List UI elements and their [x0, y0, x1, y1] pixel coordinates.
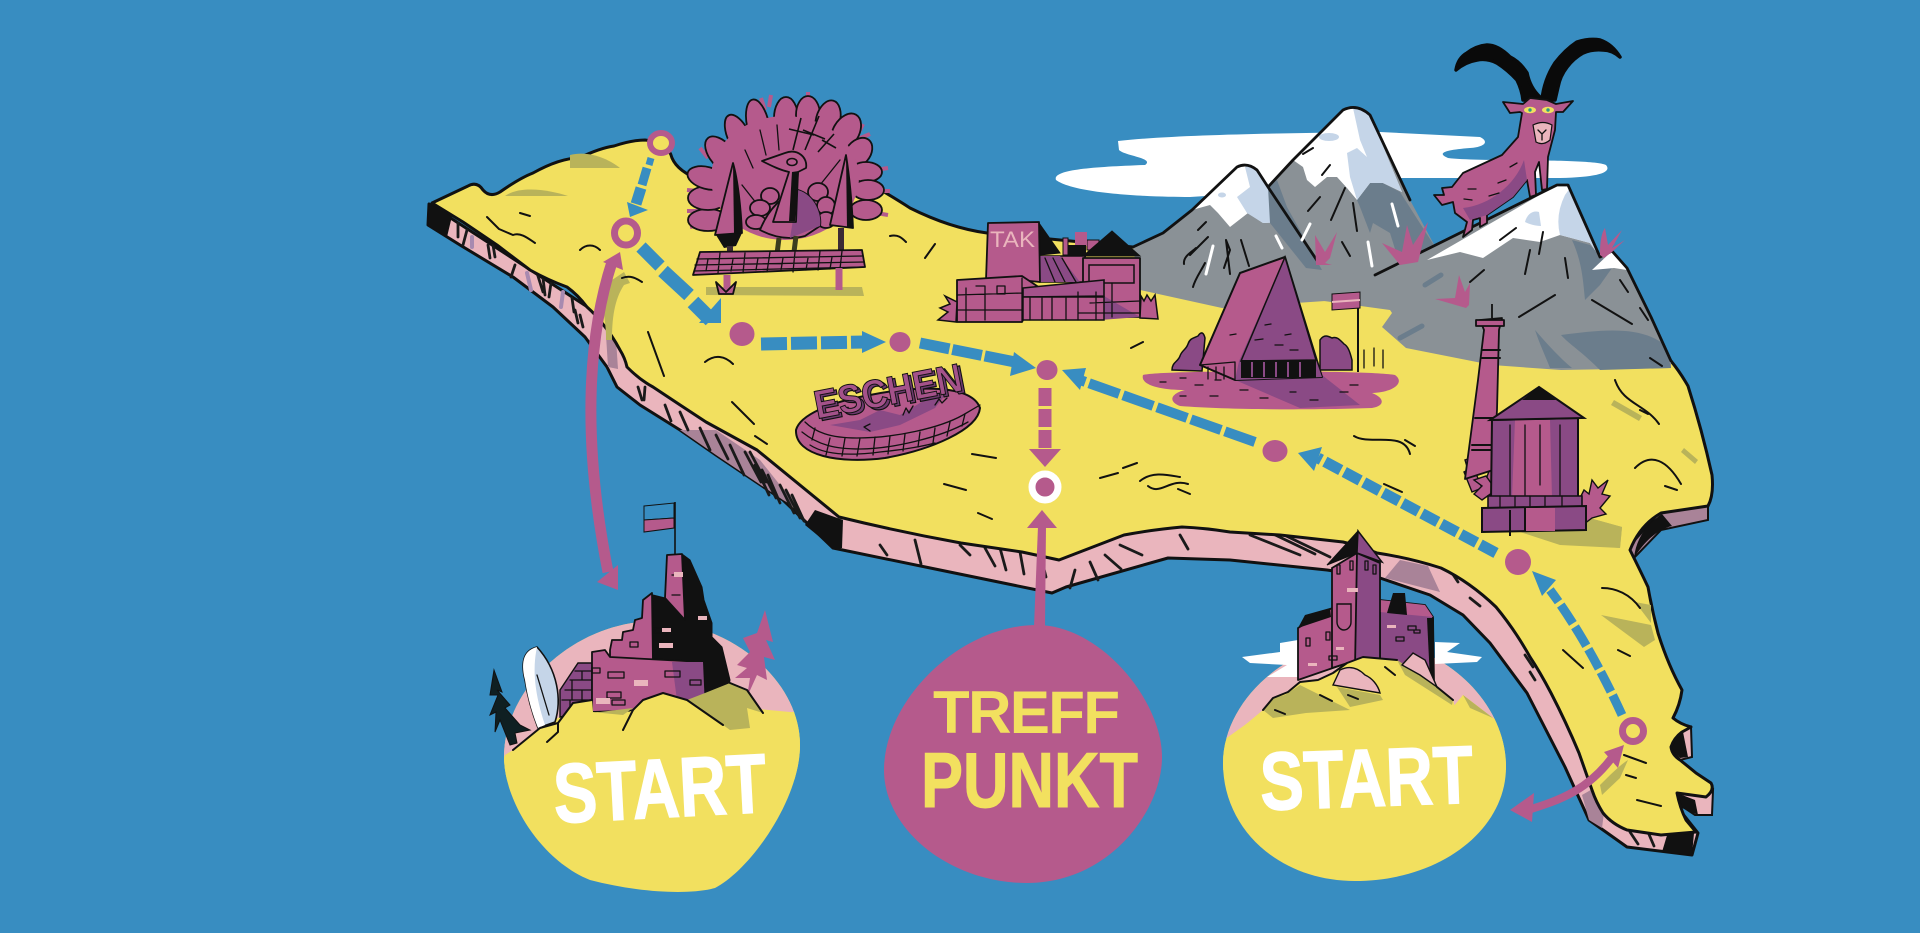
- start label: START: [1258, 730, 1474, 828]
- right castle: [1298, 531, 1434, 683]
- middle mountain: [1268, 107, 1437, 290]
- right notch undersides: [1628, 506, 1708, 558]
- start label: START: [551, 736, 769, 841]
- right clouds: [1242, 640, 1482, 677]
- route: pink dashed arrow to meeting point: [1029, 388, 1061, 467]
- crosses: [789, 116, 836, 152]
- feather sticks: [687, 92, 890, 227]
- island top surface: [432, 140, 1712, 835]
- dashes on ground: [1160, 378, 1358, 400]
- right hill: [1215, 657, 1520, 770]
- treffpunkt label: TREFF: [933, 679, 1120, 746]
- double arrow to right start: [1510, 745, 1624, 822]
- right mountain: [1320, 185, 1671, 370]
- peacock: [685, 92, 890, 294]
- tower: [1491, 418, 1578, 500]
- TAK lettering: TAK: [990, 227, 1035, 252]
- Eschen monument: ESCHEN: [810, 356, 966, 428]
- left start circle: [490, 502, 810, 892]
- fan body: [711, 116, 859, 240]
- TAK building: [938, 222, 1158, 322]
- map illustration: [426, 38, 1714, 892]
- mountain outline: [1133, 107, 1671, 361]
- island slab side: [428, 204, 1713, 855]
- slab hatching: [458, 223, 1654, 846]
- treffpunkt circle: PUNKT: [921, 736, 1138, 824]
- water tower and chimney: [1464, 304, 1622, 548]
- bird body: [760, 190, 820, 238]
- left castle: [560, 502, 730, 717]
- left mountain: [1133, 165, 1340, 308]
- mountain grass: [1315, 222, 1625, 308]
- flag: [1357, 295, 1359, 372]
- pink ground: [1143, 371, 1399, 409]
- right start circle: [1210, 531, 1520, 881]
- chimney: [1465, 304, 1502, 479]
- Eschen lettering: ESCHEN: [813, 358, 969, 430]
- mountains: [1133, 107, 1671, 370]
- plinth: [1482, 506, 1586, 532]
- clouds behind mountains: [1056, 132, 1607, 197]
- feather lobes: [685, 96, 884, 231]
- arrow from treffpunkt to meeting point: [1027, 510, 1057, 627]
- route: blue dashed arrows: [627, 158, 1622, 715]
- roof: [1200, 257, 1322, 380]
- left trees: [490, 670, 530, 745]
- Eschen monument: [796, 356, 980, 460]
- left hills: [495, 693, 810, 780]
- island ground marks: [487, 213, 1681, 806]
- treffpunkt circle: [884, 625, 1162, 883]
- trees: [715, 163, 742, 235]
- goat: [1434, 39, 1620, 237]
- island shadows: [505, 154, 1698, 795]
- bushes: [1172, 333, 1205, 371]
- double arrow to left start: [591, 252, 623, 590]
- mountain marks: [1184, 148, 1662, 366]
- brick bench: [693, 250, 865, 275]
- bird tail lobes: [746, 183, 835, 229]
- route stops: [614, 133, 1644, 742]
- A-frame church: [1143, 257, 1399, 409]
